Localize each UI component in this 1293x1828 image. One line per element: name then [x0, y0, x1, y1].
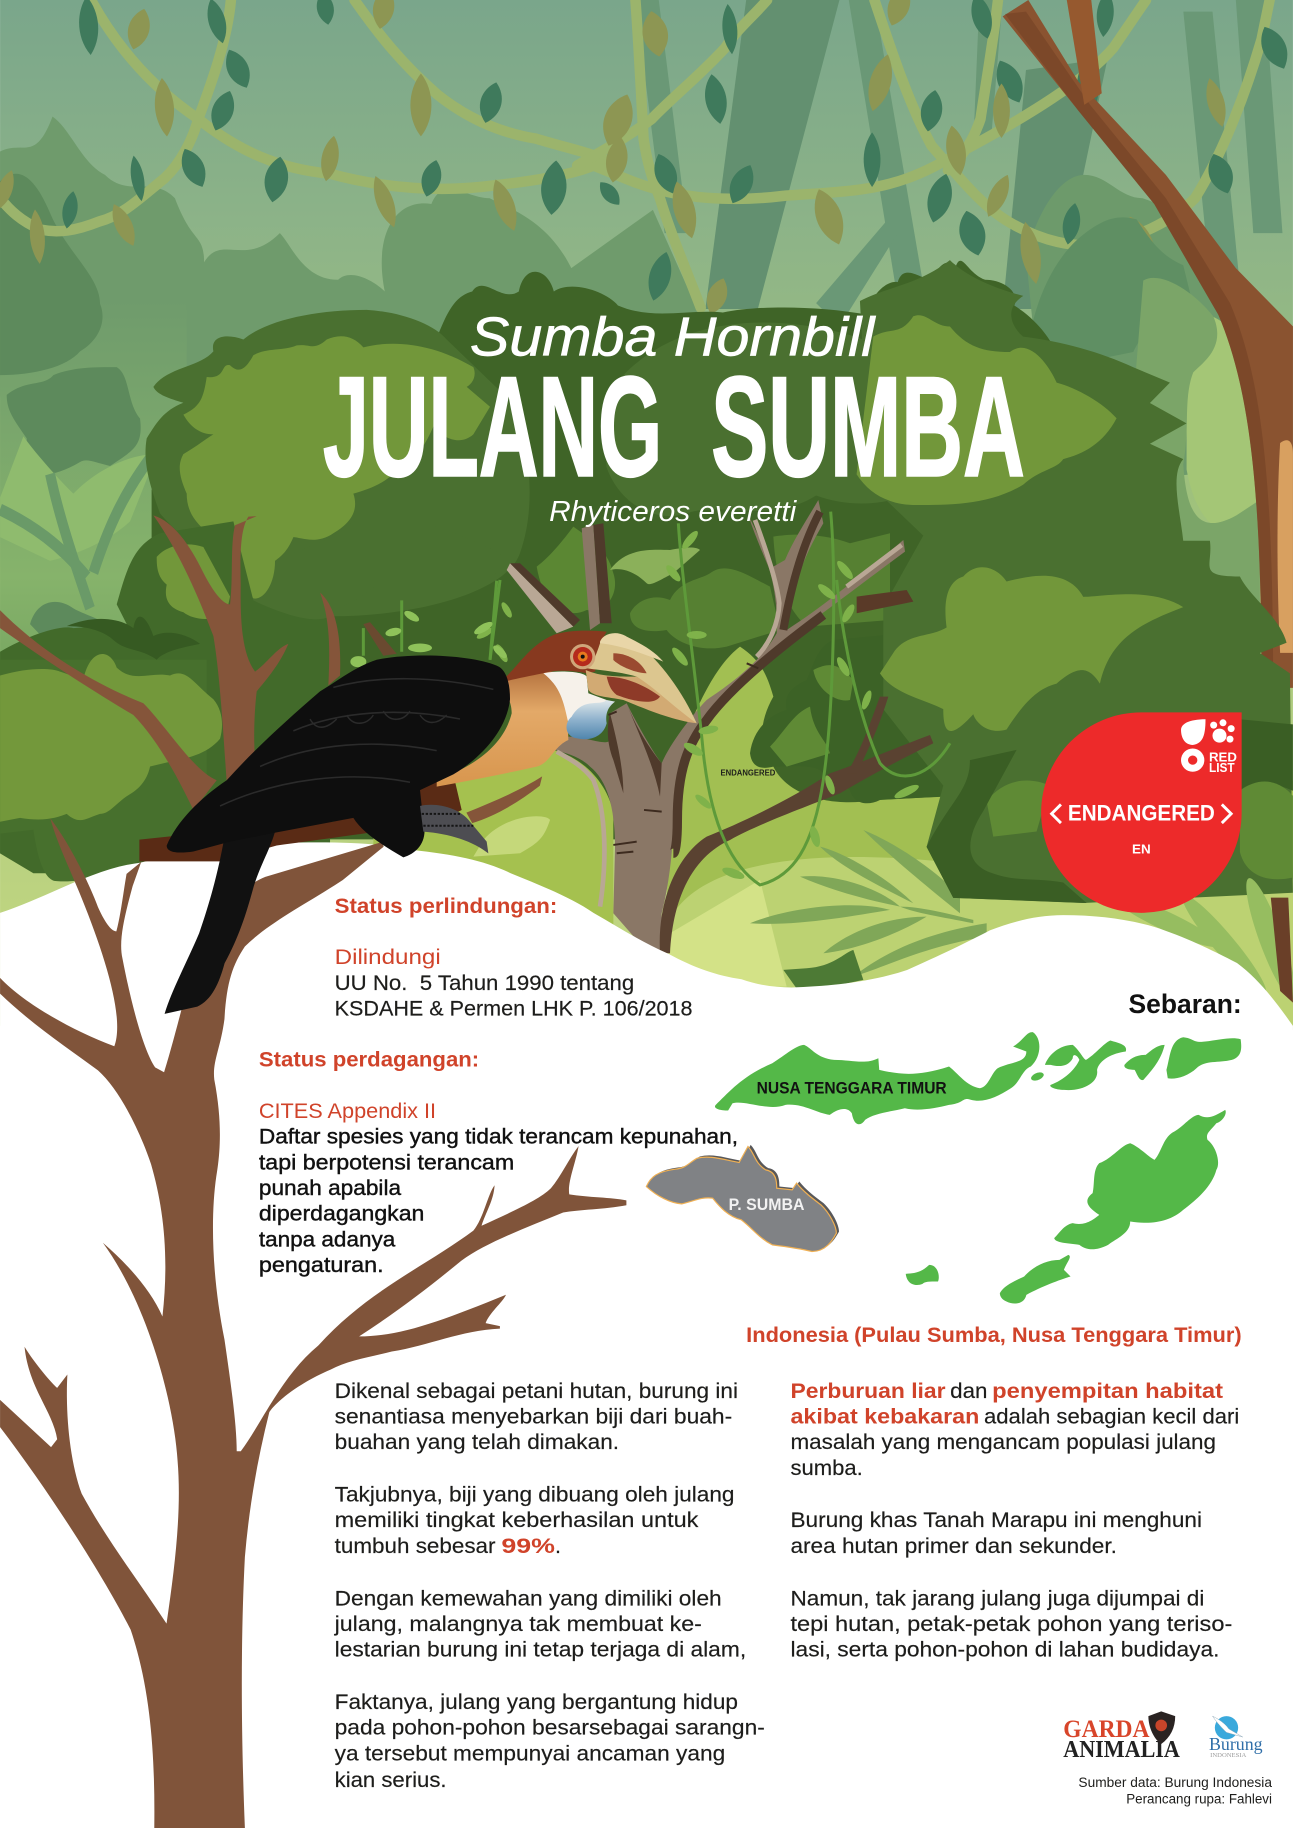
title block — [323, 306, 1025, 528]
bird: blue pouch — [566, 700, 615, 739]
trade status: pengaturan. — [259, 1252, 384, 1277]
distribution map — [646, 1032, 1241, 1304]
trade status: Status perdagangan: — [259, 1047, 479, 1072]
logo: Burung Indonesia: Burung — [1209, 1734, 1263, 1754]
bird: neck — [437, 671, 568, 787]
body text right column: sumba. — [790, 1455, 863, 1480]
leaves olive — [0, 0, 1231, 317]
dark right branches — [660, 735, 933, 953]
bird: upper bill — [587, 638, 697, 723]
trade status — [259, 1047, 738, 1277]
body text left column: julang, malangnya tak membuat ke- — [334, 1611, 702, 1636]
bird: head — [498, 631, 607, 683]
logo: Burung Indonesia: INDONESIA — [1210, 1753, 1247, 1759]
right brown tree — [1003, 0, 1293, 688]
body text left column: Dengan kemewahan yang dimiliki oleh — [335, 1585, 722, 1610]
bird: white throat — [543, 672, 607, 723]
logo: Garda Animalia — [1063, 1711, 1180, 1763]
big dark bush — [146, 310, 530, 621]
badge: red list logo — [1181, 719, 1237, 775]
map label: NTT: NUSA TENGGARA TIMUR — [757, 1080, 947, 1098]
body text left column: Dikenal sebagai petani hutan, burung ini — [335, 1378, 738, 1403]
endangered small label: ENDANGERED — [721, 768, 775, 777]
logo: Burung Indonesia — [1209, 1716, 1263, 1759]
body text right column: lasi, serta pohon-pohon di lahan budidaya. — [790, 1637, 1219, 1662]
badge: endangered label: ENDANGERED — [1068, 801, 1215, 826]
left bushes — [0, 310, 530, 881]
map label: Sumba: P. SUMBA — [729, 1196, 805, 1214]
hanging lianas — [490, 512, 950, 885]
map: sumba island — [646, 1145, 839, 1252]
left silhouettes — [0, 174, 187, 853]
badge: red list logo: RED — [1209, 749, 1237, 764]
protection status: KSDAHE & Permen LHK P. 106/2018 — [335, 995, 693, 1020]
sunlit clearing — [373, 527, 1293, 1030]
body text left column: tumbuh sebesar — [335, 1533, 496, 1558]
perch branch — [139, 774, 462, 861]
logo: Garda Animalia: ANIMALIA — [1063, 1736, 1180, 1763]
bird: neck and head group — [437, 631, 697, 787]
bird: lower bill — [586, 670, 697, 723]
lower right ferns — [1109, 874, 1293, 1003]
lower dome under light bush — [293, 516, 502, 616]
badge: red list logo: LIST — [1209, 760, 1235, 775]
dark bush mass — [152, 261, 1119, 839]
bird: casque — [600, 633, 663, 662]
body text left column: Takjubnya, biji yang dibuang oleh julang — [335, 1482, 735, 1507]
mid-left backing — [0, 521, 330, 873]
source credits — [1078, 1774, 1272, 1807]
distribution caption: Indonesia (Pulau Sumba, Nusa Tenggara Timur) — [746, 1322, 1242, 1347]
source credits: Perancang rupa: Fahlevi — [1126, 1791, 1272, 1807]
big light bush — [180, 336, 490, 599]
body text right column: Perburuan liar — [790, 1378, 946, 1403]
body text right column: akibat kebakaran — [790, 1403, 979, 1428]
body text right column: adalah sebagian kecil dari — [984, 1403, 1239, 1428]
body text right column — [790, 1378, 1239, 1662]
green sprigs above bird — [350, 581, 508, 667]
logo: Garda Animalia: GARDA — [1063, 1714, 1150, 1743]
body text right column: penyempitan habitat — [992, 1378, 1223, 1403]
clearing right of trunk — [660, 647, 1293, 1030]
map: nusa tenggara timur islands — [715, 1032, 1241, 1304]
tree back branches — [507, 563, 573, 633]
right bush — [857, 260, 1293, 903]
trade status: Daftar spesies yang tidak terancam kepunahan, — [259, 1124, 738, 1149]
ferns — [750, 830, 987, 993]
trade status: diperdagangkan — [259, 1201, 424, 1226]
body text left column: kian serius. — [335, 1767, 447, 1792]
brown tree illustration — [0, 818, 626, 1828]
body text left column: senantiasa menyebarkan biji dari buah- — [335, 1403, 732, 1428]
body text left column — [334, 1378, 765, 1792]
body text left column: pada pohon-pohon besarsebagai sarangn- — [335, 1715, 765, 1740]
subtitle: english name: Sumba Hornbill — [470, 306, 876, 368]
protection status — [335, 893, 693, 1020]
distribution heading: Sebaran: — [1129, 989, 1242, 1019]
bird: body and wing — [167, 656, 510, 857]
body text right column: dan — [950, 1378, 988, 1403]
body text left column: memiliki tingkat keberhasilan untuk — [335, 1507, 699, 1532]
protection status: UU No. 5 Tahun 1990 tentang — [335, 970, 634, 995]
leaves dark — [59, 0, 1293, 303]
trade status: punah apabila — [259, 1175, 401, 1200]
mid light bush — [157, 544, 230, 619]
body text left column: 99% — [501, 1533, 555, 1558]
body text left column: ya tersebut mempunyai ancaman yang — [335, 1740, 725, 1765]
scientific name: Rhyticeros everetti — [549, 496, 798, 528]
right silhouette behind trunk — [1030, 217, 1260, 607]
main title: SUMBA — [711, 348, 1025, 507]
IUCN status badge — [1041, 712, 1242, 913]
main title: JULANG — [323, 348, 662, 507]
trade status: tanpa adanya — [259, 1226, 395, 1251]
body text left column: buahan yang telah dimakan. — [335, 1429, 619, 1454]
badge: endangered label: EN — [1132, 841, 1151, 856]
lower-left dark bush — [0, 660, 207, 881]
left forest branches — [0, 515, 397, 810]
body text left column: Faktanya, julang yang bergantung hidup — [335, 1689, 738, 1714]
protection status: Dilindungi — [335, 944, 441, 969]
protection status: Status perlindungan: — [335, 893, 557, 918]
body text right column: tepi hutan, petak-petak pohon yang teriso- — [790, 1611, 1232, 1636]
trade status: tapi berpotensi terancam — [259, 1149, 514, 1174]
bird: tail — [165, 830, 275, 1014]
dark fern tuft — [67, 617, 200, 660]
body text left column: . — [555, 1533, 561, 1558]
body text right column: Namun, tak jarang julang juga dijumpai di — [790, 1585, 1204, 1610]
tree trunk and main branches — [555, 500, 905, 957]
bush blotches around tree — [537, 527, 615, 613]
central tree — [475, 500, 950, 957]
body text right column: masalah yang mengancam populasi julang — [790, 1429, 1216, 1454]
body text left column: lestarian burung ini tetap terjaga di alam, — [335, 1637, 746, 1662]
hornbill bird — [165, 631, 697, 1014]
white wave panel — [0, 842, 1293, 1828]
vines — [0, 0, 1270, 308]
forest background — [0, 0, 1293, 1030]
liana leaflets — [475, 529, 920, 881]
trade status: CITES Appendix II — [259, 1098, 436, 1123]
center hump — [606, 323, 944, 516]
bird: foot — [420, 805, 488, 853]
body text right column: area hutan primer dan sekunder. — [790, 1533, 1117, 1558]
lower-left light bush — [0, 654, 222, 822]
bird: eye — [570, 644, 595, 669]
clearing left of trunk — [373, 750, 613, 947]
source credits: Sumber data: Burung Indonesia — [1078, 1774, 1272, 1790]
badge: endangered label — [1052, 801, 1231, 856]
body text right column: Burung khas Tanah Marapu ini menghuni — [790, 1507, 1202, 1532]
thin branch behind feet — [466, 776, 542, 823]
